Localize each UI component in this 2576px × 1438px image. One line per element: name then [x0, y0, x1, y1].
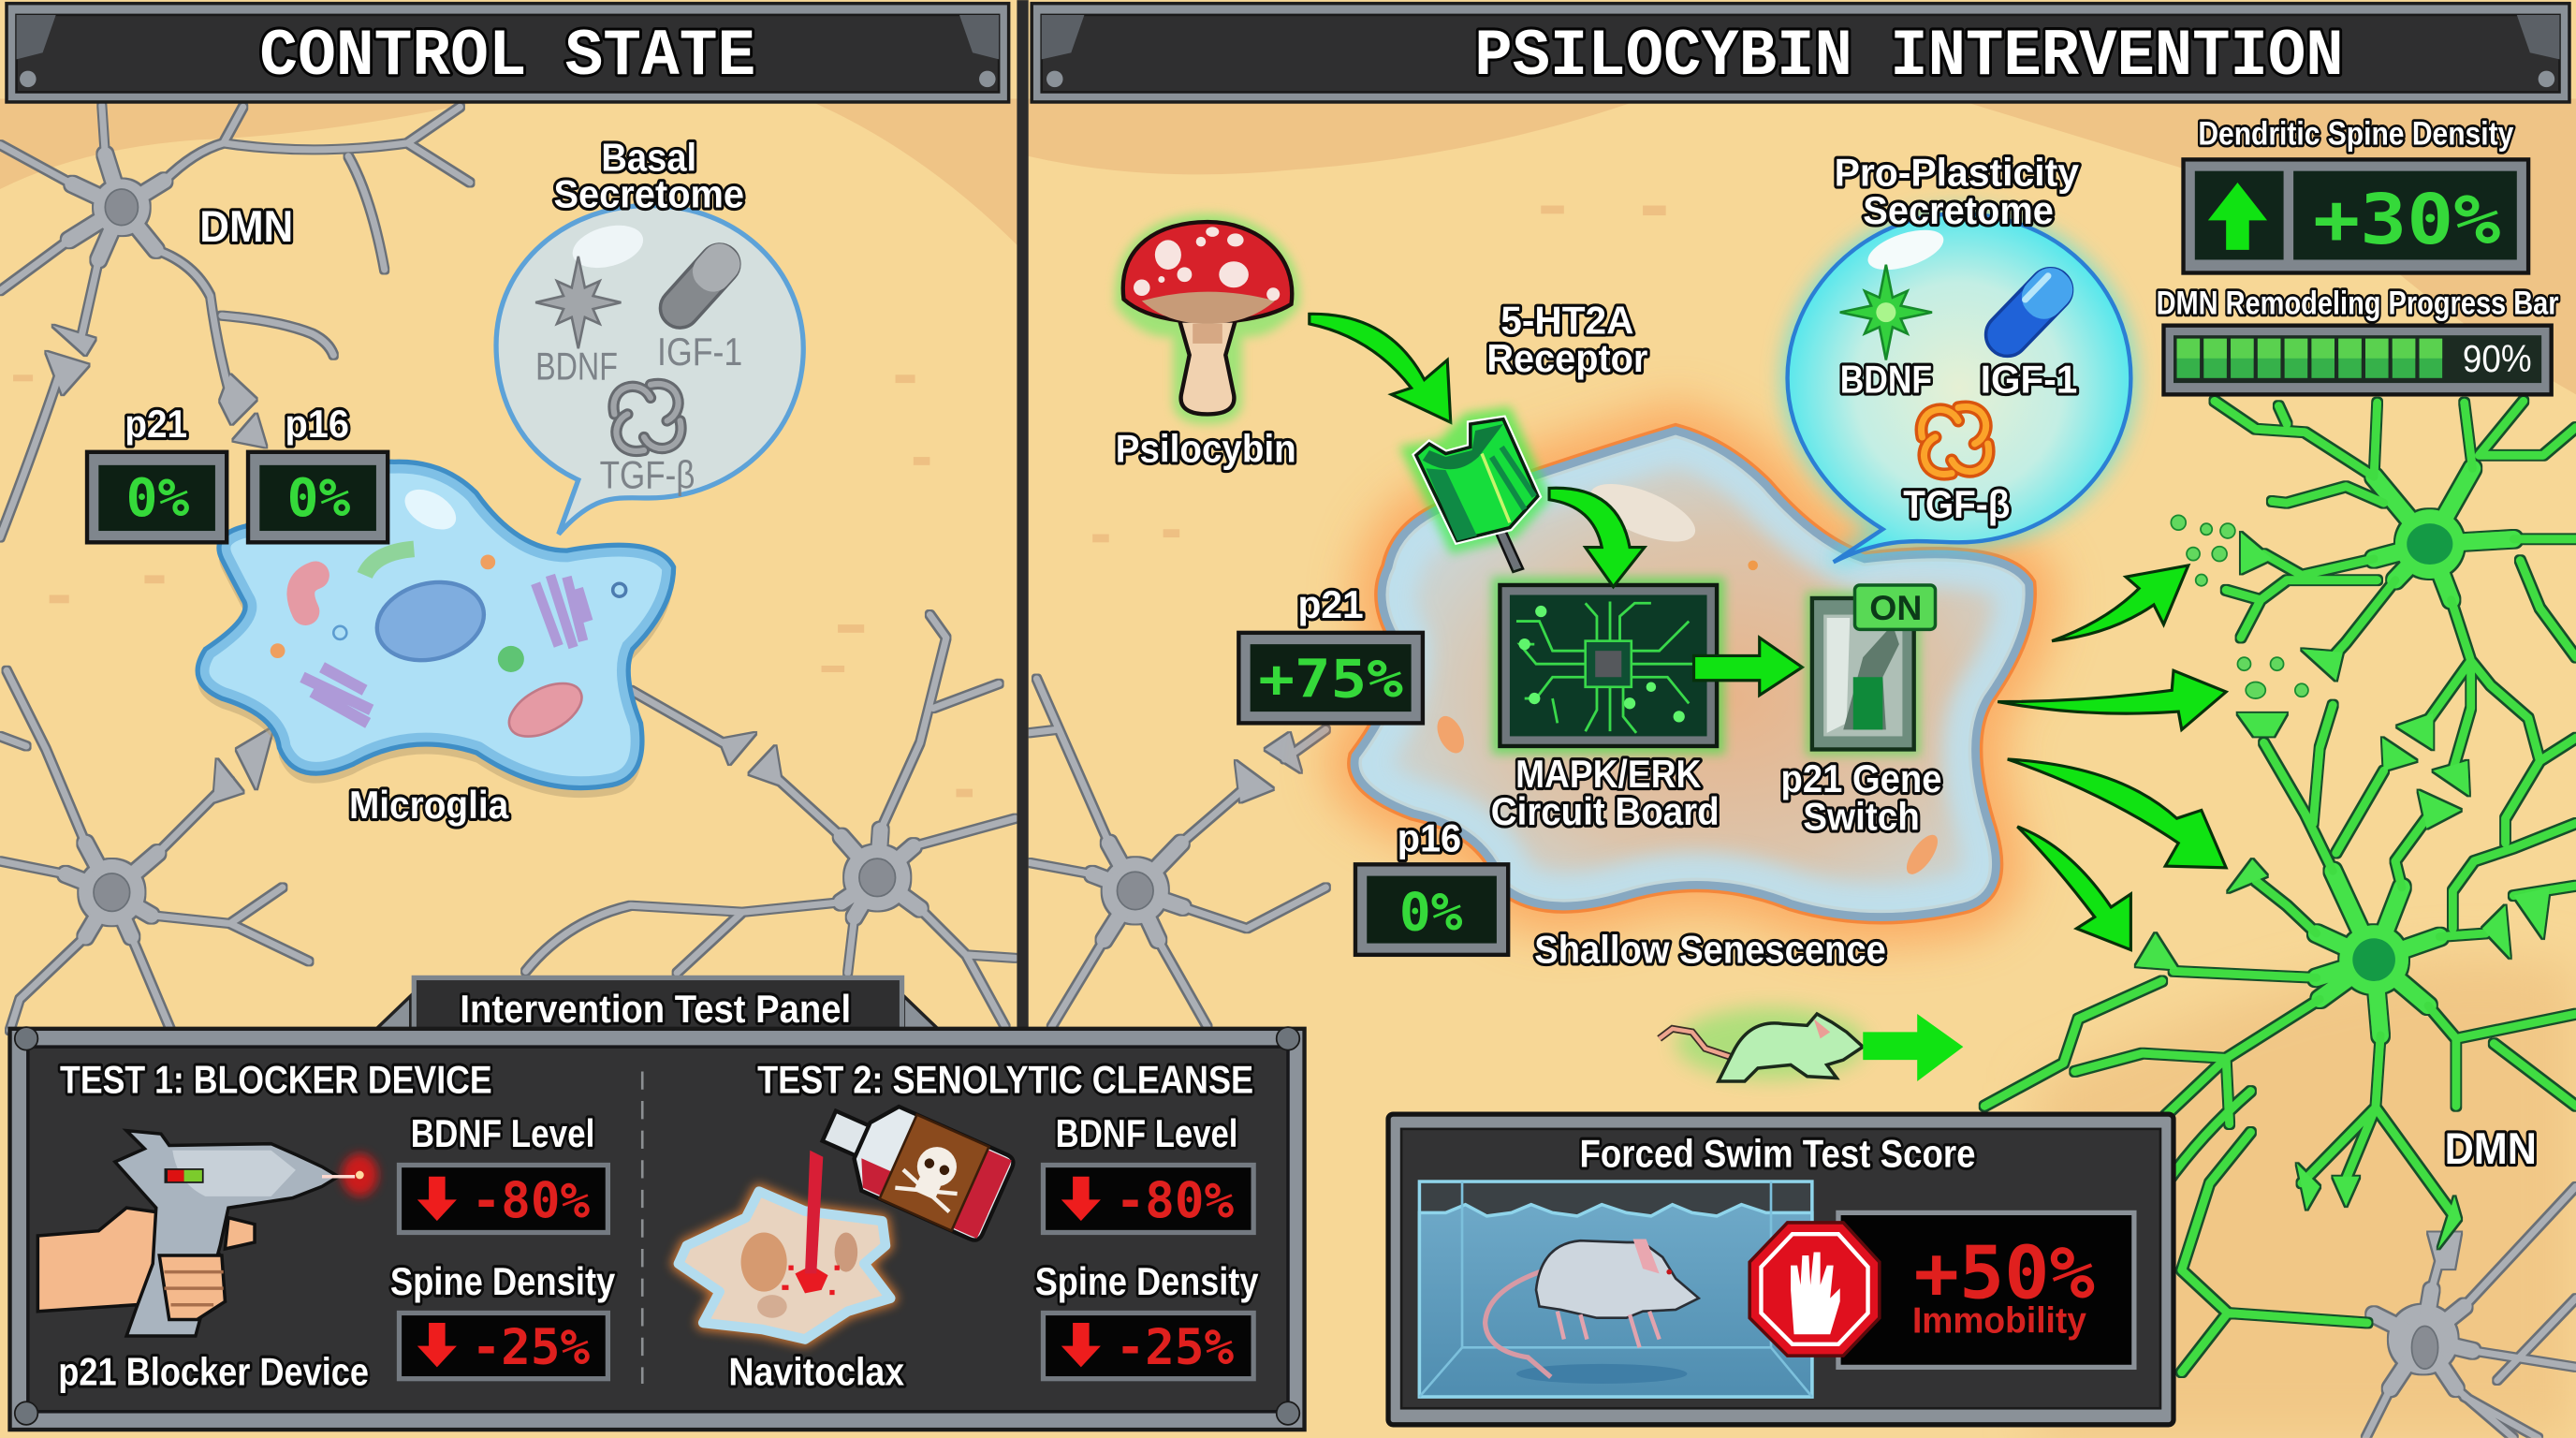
label: receptor: Receptor — [1486, 336, 1647, 380]
readout: test 2 BDNF: BDNF Level — [1056, 1111, 1237, 1155]
organelle: small vesicles — [271, 554, 626, 672]
readout: p21 control — [87, 402, 227, 542]
neurons: intervention grey network — [1029, 679, 2576, 1438]
panel: forced swim test — [1388, 1114, 2174, 1425]
heading: pro-plasticity secretome: Pro-Plasticity — [1835, 150, 2080, 194]
readout: test 1 BDNF: BDNF Level — [411, 1111, 594, 1155]
bubble: basal secretome — [496, 206, 803, 535]
readout: dendritic spine density +30%: +30% — [2313, 181, 2500, 260]
readout: p21 intervention: +75% — [1258, 649, 1403, 710]
readout: p21 control: 0% — [126, 468, 189, 529]
bubble label: TGF-beta: TGF-β — [600, 452, 695, 496]
bubble label: IGF-1: IGF-1 — [1981, 358, 2077, 402]
readout: dendritic spine density +30% — [2184, 159, 2528, 272]
tab: side braces — [370, 996, 944, 1035]
readout: p16 control: p16 — [285, 402, 349, 446]
arrow: secretome to neuron D — [2017, 827, 2130, 950]
arrow: secretome to neuron A — [2052, 565, 2188, 641]
icon: TGF-beta orange swirl — [1922, 406, 1989, 475]
bubble label: TGF-beta: TGF-β — [1903, 482, 2010, 526]
neuron nuclei: intervention — [1117, 872, 2438, 1369]
heading: test 1: TEST 1: BLOCKER DEVICE — [60, 1057, 492, 1101]
readout: test 2 BDNF: -80% — [1116, 1173, 1234, 1230]
cell: shallow senescence microglia — [1354, 431, 2029, 917]
heading: basal secretome: Basal — [601, 136, 696, 180]
icon: p21 gene switch — [1806, 585, 1936, 756]
readout: p16 control: 0% — [287, 468, 350, 529]
arrow: circuit board to gene switch — [1694, 638, 1802, 696]
icon: p21 blocker gun and hand — [37, 1131, 378, 1336]
label: gene switch — [1781, 756, 1942, 838]
label: DMN intervention: DMN — [2445, 1124, 2537, 1174]
readout: p21 control: p21 — [124, 402, 187, 446]
neuron: green upper DMN neuron — [1984, 401, 2576, 1372]
organelle: nucleus — [369, 571, 492, 671]
readout: test 1 spine density — [390, 1259, 616, 1379]
readout: immobility: Immobility — [1912, 1301, 2086, 1342]
arrow: mouse to DMN — [1863, 1014, 1963, 1081]
heading: test 2: TEST 2: SENOLYTIC CLEANSE — [757, 1057, 1253, 1101]
neuron nuclei: control — [94, 189, 896, 911]
organelle: mitochondrion pink — [300, 575, 315, 611]
organelle: golgi right — [535, 575, 588, 648]
neuron nuclei: green — [2352, 523, 2452, 981]
icon: dying cell — [679, 1192, 890, 1340]
readout: immobility: +50% — [1914, 1232, 2095, 1316]
chart: DMN remodeling progress bar — [2163, 326, 2552, 394]
heading: pro-plasticity secretome — [1835, 150, 2080, 232]
panel: intervention test panel — [10, 977, 1305, 1430]
label: ON: ON — [1869, 589, 1922, 627]
readout: p16 control — [248, 402, 388, 542]
panel: control state header — [7, 4, 1009, 102]
icon: active green mouse — [1660, 1007, 1866, 1081]
heading: basal secretome — [553, 136, 744, 215]
label: DMN control: DMN — [199, 202, 293, 252]
label: psilocybin: Psilocybin — [1116, 426, 1296, 470]
label: navitoclax: Navitoclax — [728, 1350, 905, 1394]
label: circuit board: Circuit Board — [1491, 789, 1720, 833]
label: shallow senescence: Shallow Senescence — [1534, 928, 1886, 972]
heading: pro-plasticity secretome: Secretome — [1863, 188, 2054, 232]
icon: IGF-1 grey capsule — [652, 236, 748, 336]
panel: psilocybin intervention header: PSILOCYBIN INTERVENTION — [1474, 21, 2344, 95]
arrow: secretome to neuron B — [1998, 670, 2226, 729]
readout: test 2 spine density: -25% — [1116, 1319, 1234, 1376]
icon: swim tank — [1419, 1181, 1812, 1397]
readout: test 2 spine density — [1035, 1259, 1259, 1379]
label: receptor — [1486, 298, 1647, 380]
readout: test 1 spine density: Spine Density — [390, 1259, 616, 1303]
label: circuit board: MAPK/ERK — [1515, 752, 1702, 796]
arrow: receptor to circuit board — [1549, 488, 1645, 587]
organelle: mitochondrion lower — [501, 672, 591, 747]
readout: test 1 BDNF: -80% — [472, 1173, 590, 1230]
icon: TGF-beta grey swirl — [613, 384, 681, 451]
bubble label: BDNF: BDNF — [535, 345, 618, 389]
panel frame — [10, 1029, 1305, 1430]
icon: IGF-1 blue capsule — [1977, 259, 2081, 365]
label: gene switch: Switch — [1803, 794, 1920, 838]
readout: test 1 spine density: -25% — [472, 1319, 590, 1376]
organelle: green ER — [365, 549, 414, 575]
label: gene switch: p21 Gene — [1781, 756, 1942, 800]
label: receptor: 5-HT2A — [1500, 298, 1633, 342]
label: p21 blocker device: p21 Blocker Device — [58, 1350, 369, 1394]
cell: control microglia — [198, 462, 674, 798]
value: 90%: 90% — [2463, 337, 2532, 380]
icon: mushroom psilocybin — [1121, 220, 1294, 418]
icon: BDNF grey star — [535, 257, 621, 348]
panel: psilocybin intervention header — [1032, 4, 2569, 102]
readout: p21 intervention — [1238, 582, 1423, 723]
label: circuit board — [1491, 752, 1720, 833]
readout: test 2 BDNF — [1043, 1111, 1253, 1232]
readout: immobility — [1838, 1212, 2134, 1367]
heading: basal secretome: Secretome — [553, 171, 744, 215]
bubble: pro-plasticity secretome — [1788, 213, 2130, 562]
organelle: golgi left — [302, 668, 372, 723]
divider between panels — [1017, 0, 1029, 1035]
heading: dendritic spine density: Dendritic Spine Density — [2198, 116, 2514, 153]
icon: navitoclax bottle — [805, 1084, 1016, 1273]
readout: p16 intervention — [1355, 815, 1508, 955]
icon: immobile grey mouse — [1486, 1239, 1699, 1377]
tab label: Intervention Test Panel — [460, 987, 851, 1031]
label: microglia: Microglia — [349, 783, 509, 827]
bubble label: IGF-1: IGF-1 — [657, 330, 742, 374]
arrow: secretome to neuron C — [2008, 759, 2226, 868]
panel: MAPK/ERK circuit board — [1492, 577, 1725, 755]
arrow: psilocybin to receptor — [1310, 314, 1451, 422]
readout: test 1 BDNF — [399, 1111, 607, 1232]
plasticity spine particles — [2171, 515, 2308, 698]
readout: p16 intervention: p16 — [1398, 815, 1461, 859]
heading: forced swim test score: Forced Swim Test Score — [1580, 1131, 1976, 1175]
neurons: control DMN network — [0, 105, 1016, 1031]
readout: p16 intervention: 0% — [1399, 883, 1463, 944]
icon: up arrow — [2208, 183, 2267, 250]
bubble label: BDNF: BDNF — [1840, 358, 1932, 402]
readout: p21 intervention: p21 — [1298, 582, 1364, 626]
icon: 5-HT2A receptor — [1416, 419, 1538, 572]
icon: BDNF green star — [1840, 265, 1932, 360]
readout: test 2 spine density: Spine Density — [1035, 1259, 1259, 1303]
icon: stop sign with hand — [1749, 1223, 1880, 1356]
panel: control state header: CONTROL STATE — [259, 21, 755, 95]
